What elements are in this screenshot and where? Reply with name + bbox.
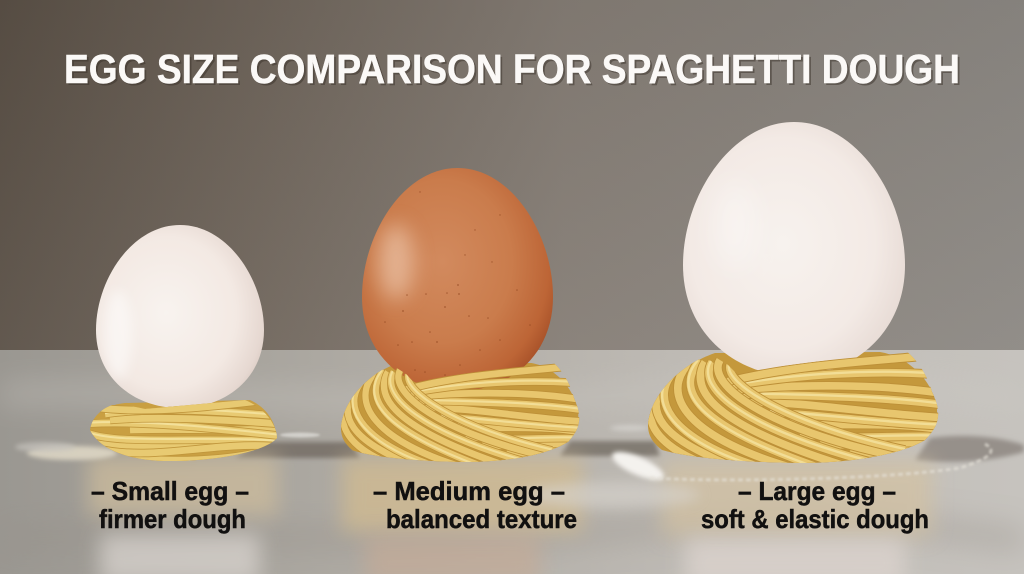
- label: small egg: [91, 476, 249, 534]
- flour dusting: [15, 425, 991, 508]
- label: large egg: [701, 476, 929, 534]
- small nest strands: [85, 400, 282, 460]
- label: large egg: – Large egg –: [738, 476, 896, 506]
- small nest back: [90, 400, 276, 461]
- small white egg: [96, 225, 264, 408]
- title: EGG SIZE COMPARISON FOR SPAGHETTI DOUGH: [64, 46, 960, 92]
- marble table surface: [0, 350, 1024, 574]
- table shadows: [235, 436, 1024, 462]
- label: medium egg: balanced texture: [386, 504, 577, 534]
- medium nest back: [341, 363, 578, 462]
- label: large egg: soft & elastic dough: [701, 504, 929, 534]
- label: small egg: firmer dough: [99, 504, 246, 534]
- label: medium egg: – Medium egg –: [373, 476, 565, 506]
- large white egg: [683, 122, 905, 376]
- background wall: [0, 0, 1024, 352]
- medium nest strands: [343, 367, 589, 468]
- label: small egg: – Small egg –: [91, 476, 249, 506]
- medium brown egg: [362, 168, 553, 391]
- large nest back: [648, 352, 937, 463]
- label: medium egg: [373, 476, 577, 534]
- large nest strands: [651, 356, 950, 470]
- nest and egg reflections: [88, 456, 932, 574]
